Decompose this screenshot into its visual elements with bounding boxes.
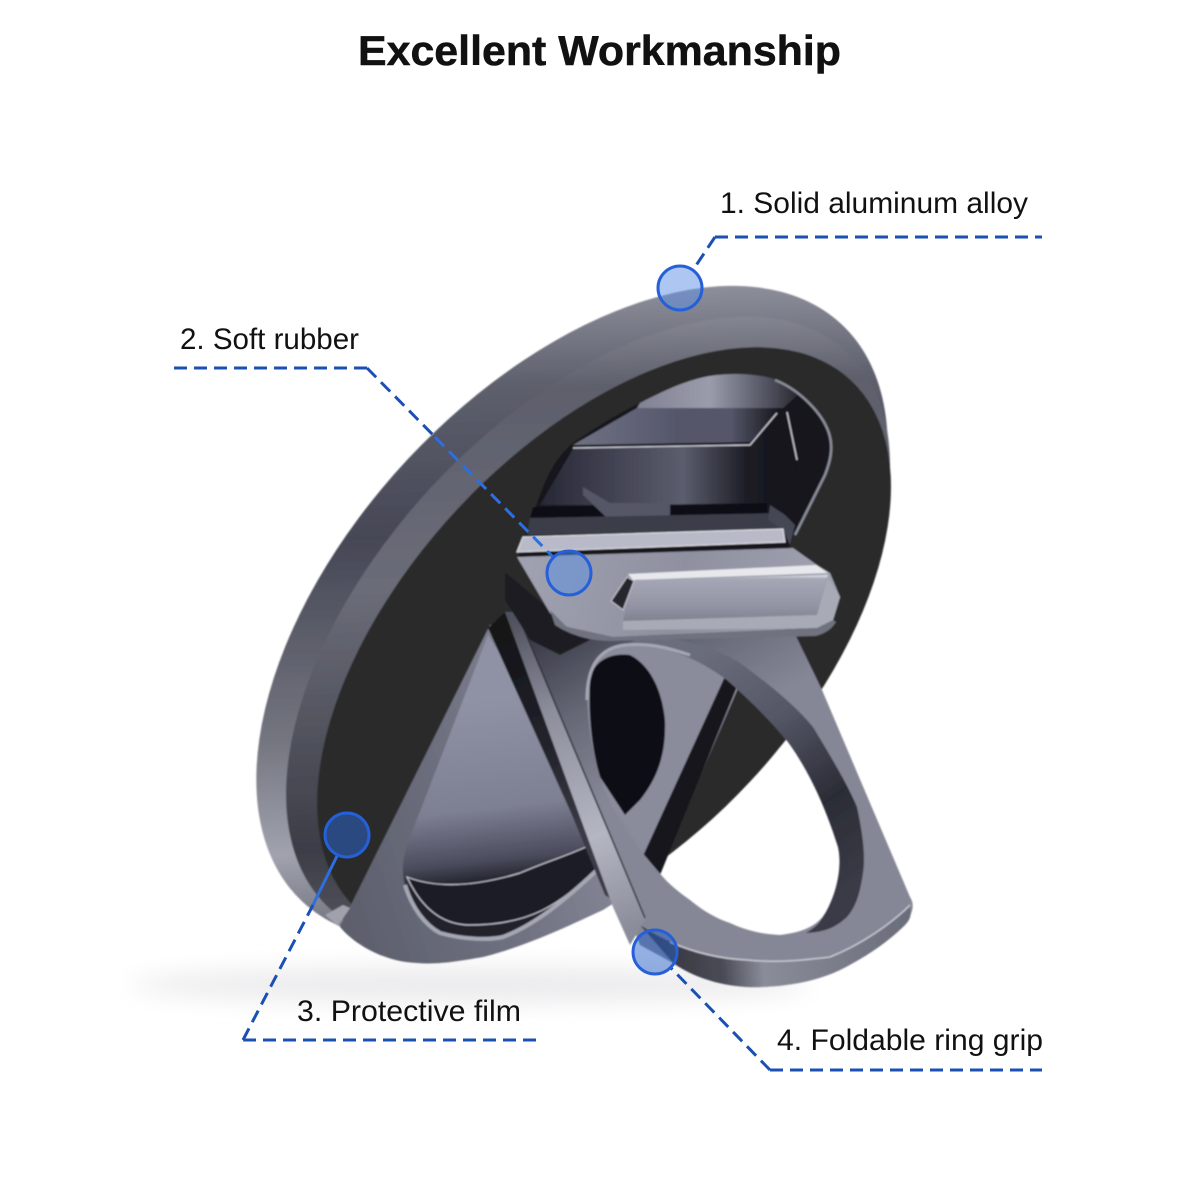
lower plate cavity — [403, 635, 620, 938]
callout 2 line — [170, 368, 435, 437]
marker 4 — [633, 930, 677, 974]
cavity edge highlight — [573, 412, 797, 460]
ring arm strip — [505, 612, 645, 945]
black band — [530, 503, 767, 518]
cavity plate A — [573, 408, 783, 445]
cavity top light area — [637, 374, 800, 408]
inner bevel — [174, 208, 1002, 1052]
ring underside — [640, 907, 911, 987]
lower metal plate — [340, 620, 735, 963]
callout 2 line on product — [435, 437, 553, 557]
hinge bar slot — [611, 577, 634, 610]
callout 3 stem — [313, 856, 337, 905]
label 1: 1. Solid aluminum alloy — [720, 187, 1028, 220]
marker 2 — [547, 551, 591, 595]
hinge plate — [517, 548, 840, 637]
ring inner bevel — [625, 638, 864, 933]
top hinge bar — [517, 529, 785, 552]
lower cavity arc — [407, 845, 597, 925]
dark edge bar — [642, 672, 743, 875]
label 4: 4. Foldable ring grip — [777, 1024, 1043, 1057]
hinge front bar shadow — [628, 565, 828, 580]
callout 4 line — [671, 968, 1042, 1070]
label 3: 3. Protective film — [297, 995, 521, 1028]
product: ring holder — [138, 171, 1006, 1055]
hinge front bar — [623, 575, 828, 621]
cavity plate B — [540, 413, 797, 505]
title: Excellent Workmanship — [358, 27, 841, 74]
right tab — [768, 505, 795, 545]
callout 3 line — [243, 905, 540, 1040]
foldable ring grip — [505, 612, 913, 987]
dark under hinge — [505, 572, 590, 655]
lower cavity rim highlight — [405, 872, 595, 939]
label 2: 2. Soft rubber — [180, 323, 359, 356]
marker 3 — [325, 813, 369, 857]
dark cavity in finger hole — [589, 654, 665, 815]
ring hole light edge — [587, 644, 690, 700]
lower strip — [527, 513, 787, 535]
outer aluminum disc rim — [138, 171, 1006, 1055]
dark band beside arm — [488, 612, 620, 905]
cavity rim highlight — [775, 380, 831, 535]
plate corner highlight — [325, 905, 350, 926]
ring underside highlight — [670, 905, 910, 961]
marker 1 — [658, 266, 702, 310]
hinge lower band — [550, 610, 836, 641]
cavity tab — [583, 487, 670, 518]
soft rubber pad — [211, 244, 997, 1046]
ring arm edge line — [518, 615, 645, 918]
upper cavity — [517, 374, 832, 560]
callout 1 line — [693, 237, 1042, 270]
hinge bar end — [623, 578, 840, 630]
gray plate inside ring — [590, 650, 745, 870]
ground shadow — [130, 967, 810, 1003]
